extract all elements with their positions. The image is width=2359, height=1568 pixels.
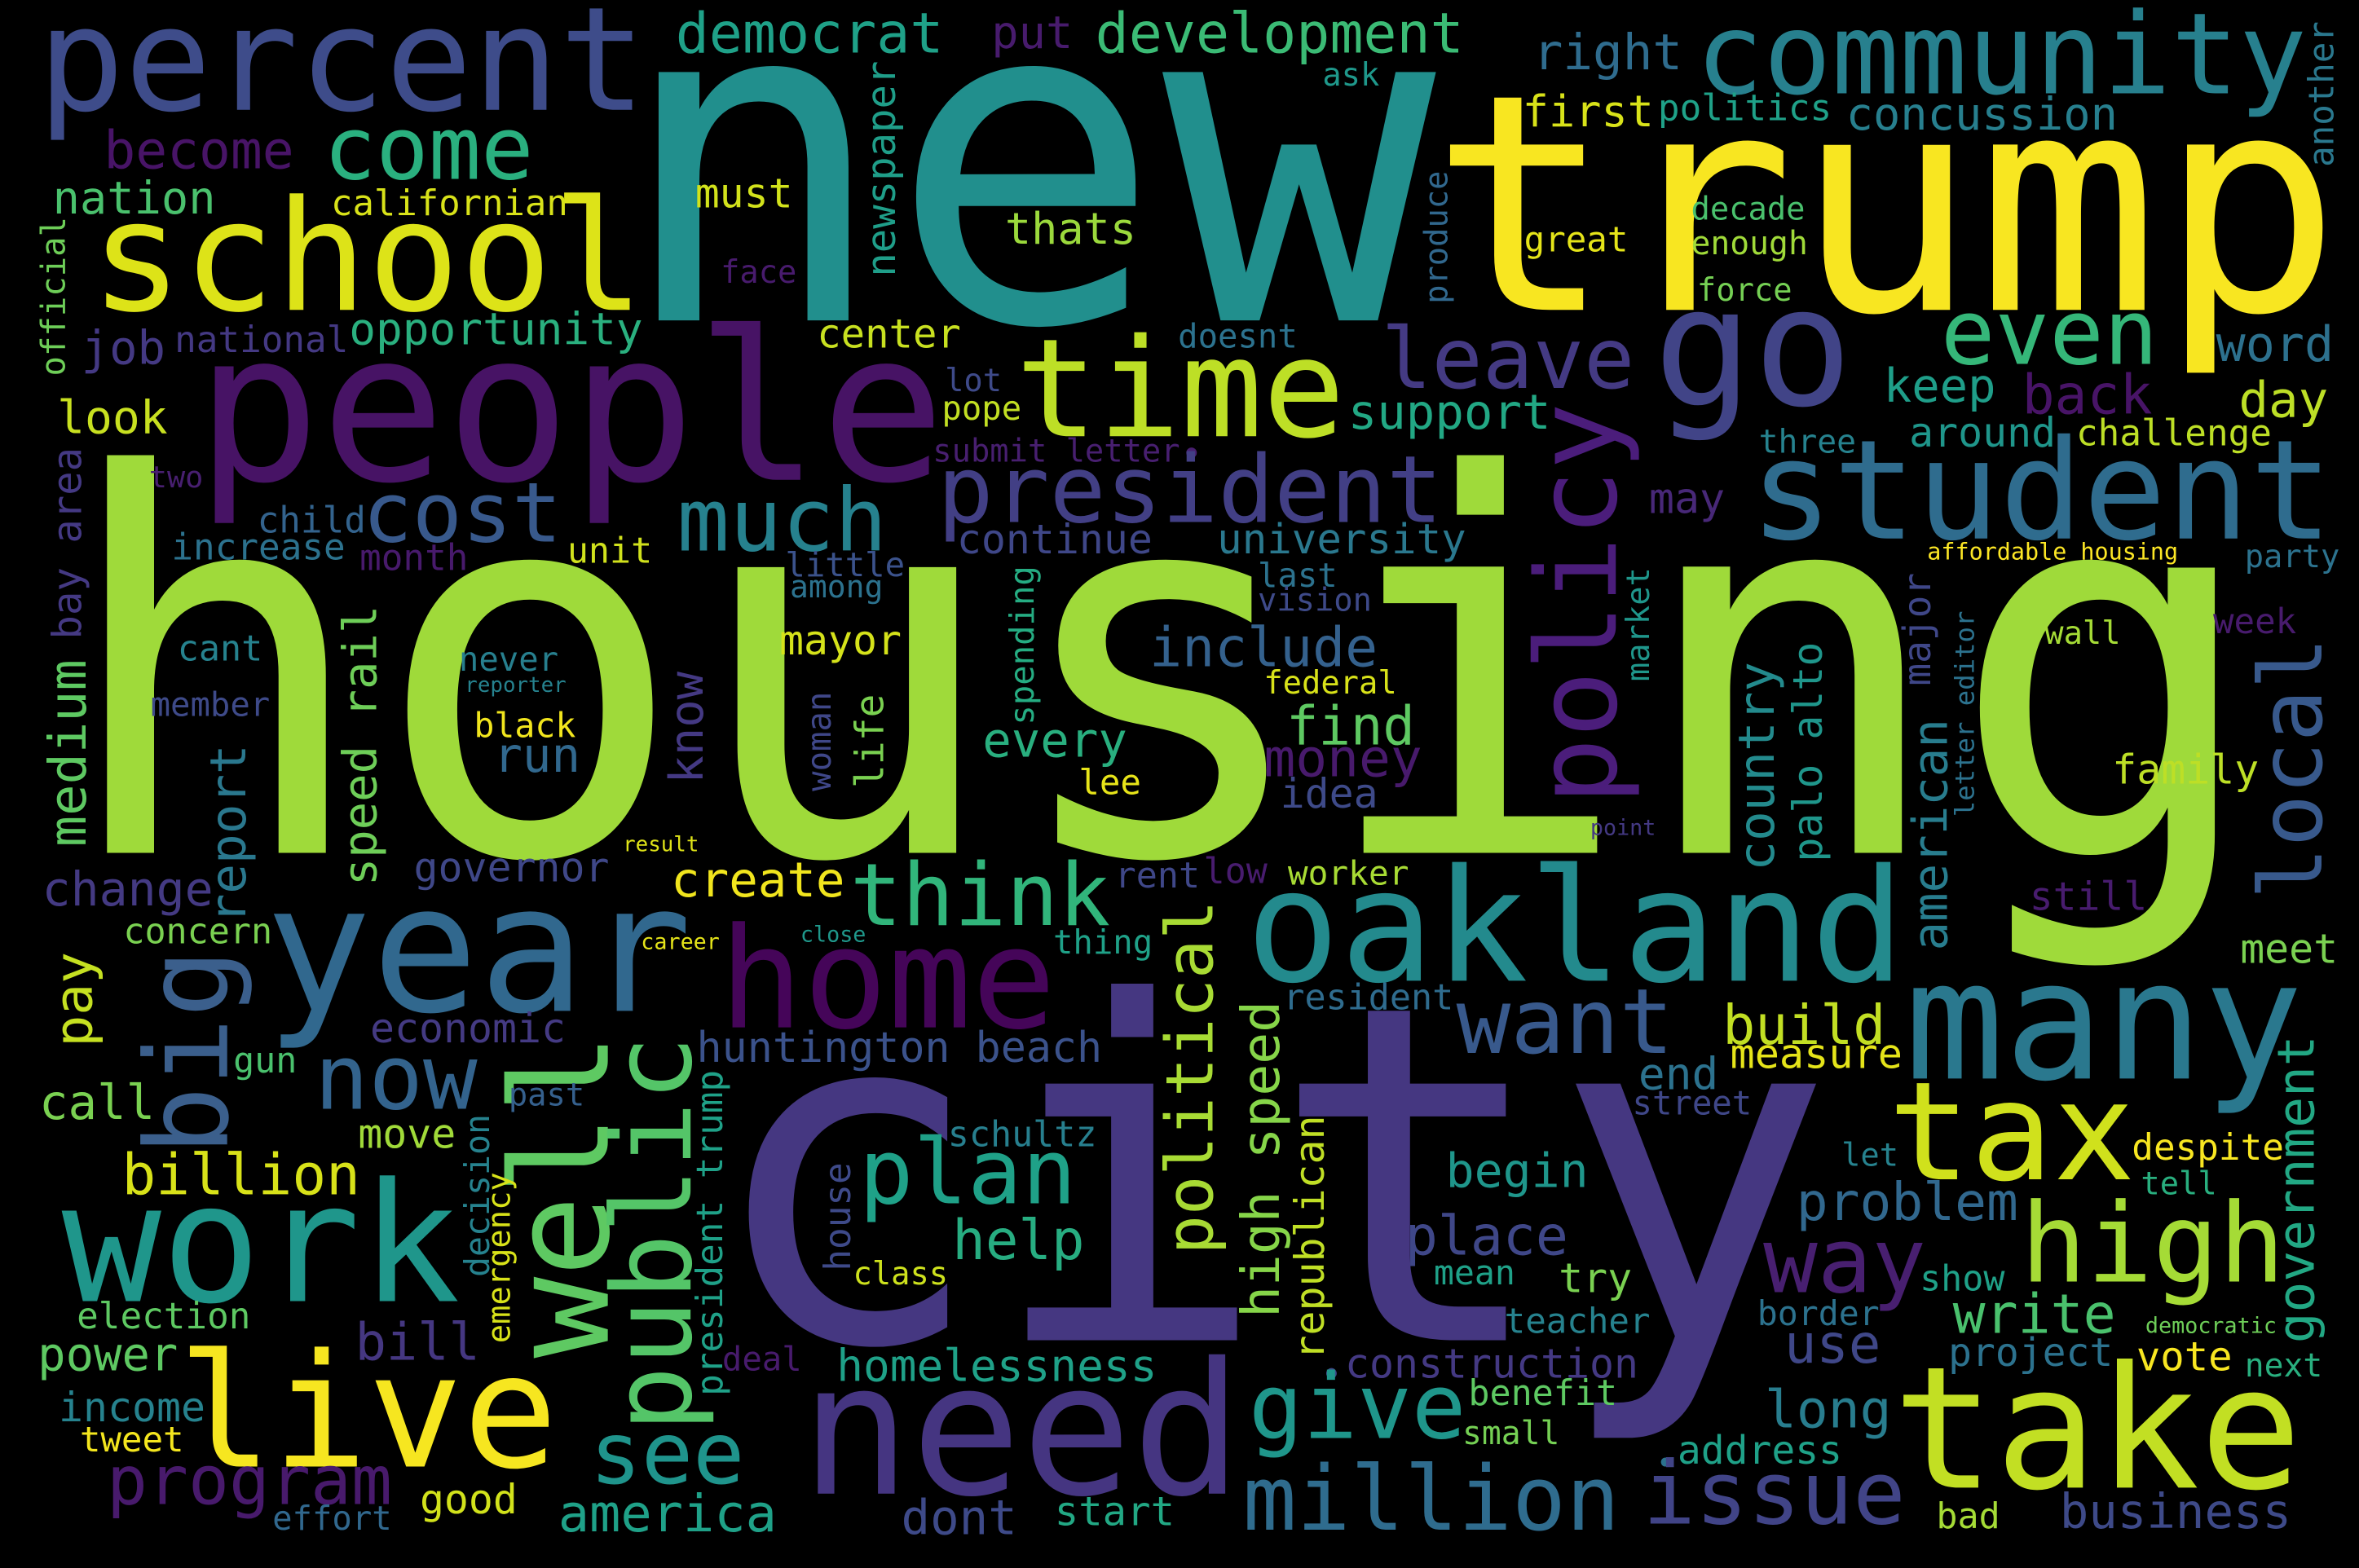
- word: produce: produce: [1419, 171, 1456, 304]
- word: family: family: [2112, 747, 2259, 794]
- word: back: back: [2022, 363, 2153, 427]
- word: bill: bill: [355, 1313, 480, 1373]
- word: address: address: [1678, 1428, 1842, 1473]
- word: submit letter: submit letter: [933, 434, 1180, 470]
- word: even: even: [1941, 281, 2158, 386]
- word: unit: unit: [567, 531, 652, 571]
- word: problem: problem: [1797, 1172, 2018, 1233]
- word: create: create: [671, 852, 844, 908]
- word: month: month: [359, 538, 468, 579]
- word: past: past: [509, 1077, 584, 1114]
- word: concussion: concussion: [1846, 89, 2118, 141]
- word: force: force: [1697, 272, 1792, 309]
- word: place: place: [1405, 1204, 1568, 1267]
- word: effort: effort: [272, 1499, 392, 1538]
- word: palo alto: palo alto: [1784, 642, 1832, 862]
- word: way: way: [1763, 1209, 1926, 1314]
- word: power: power: [37, 1328, 178, 1381]
- word: government: government: [2267, 1035, 2326, 1343]
- word: public: public: [589, 1035, 717, 1432]
- word: worker: worker: [1288, 853, 1409, 892]
- word: go: go: [1653, 252, 1853, 444]
- word: live: live: [178, 1320, 558, 1504]
- word: gun: gun: [233, 1041, 297, 1081]
- word: think: think: [850, 845, 1110, 946]
- word: move: move: [358, 1110, 456, 1157]
- word: big: big: [122, 949, 255, 1156]
- word: policy: policy: [1513, 403, 1642, 804]
- word: major: major: [1895, 573, 1939, 686]
- word: high speed: high speed: [1231, 1001, 1292, 1318]
- word: career: career: [641, 930, 720, 955]
- word: low: low: [1204, 851, 1268, 892]
- word: income: income: [59, 1384, 205, 1431]
- word: end: end: [1638, 1047, 1718, 1099]
- word: political: political: [1152, 900, 1228, 1254]
- word: run: run: [493, 727, 580, 783]
- word: despite: despite: [2132, 1127, 2284, 1169]
- word: official: official: [33, 217, 73, 376]
- word: woman: woman: [800, 692, 839, 791]
- word: next: next: [2245, 1347, 2322, 1385]
- word: doesnt: doesnt: [1178, 316, 1298, 355]
- word: bad: bad: [1936, 1496, 2000, 1537]
- word: teacher: teacher: [1505, 1302, 1651, 1341]
- word: two: two: [149, 460, 203, 495]
- word: little: little: [785, 545, 905, 584]
- word: include: include: [1149, 616, 1378, 680]
- word: black: black: [474, 705, 575, 745]
- word: cost: cost: [363, 465, 562, 561]
- word: vote: vote: [2136, 1333, 2233, 1380]
- word: week: week: [2213, 602, 2296, 642]
- word: need: need: [800, 1324, 1242, 1538]
- word: time: time: [1016, 309, 1345, 469]
- word: ask: ask: [1322, 57, 1379, 94]
- word: benefit: benefit: [1468, 1373, 1617, 1414]
- word: result: result: [623, 833, 699, 857]
- word: another: another: [2303, 21, 2343, 167]
- word: cant: cant: [178, 628, 262, 669]
- word: million: million: [1243, 1447, 1620, 1551]
- word: house: house: [818, 1162, 859, 1271]
- word: concern: concern: [123, 911, 272, 952]
- word: give: give: [1249, 1354, 1466, 1460]
- word: reporter: reporter: [465, 673, 567, 698]
- word: among: among: [790, 569, 883, 605]
- word: many: many: [1905, 925, 2304, 1117]
- word: speed rail: speed rail: [333, 606, 387, 886]
- word: federal: federal: [1263, 665, 1397, 702]
- word: still: still: [2030, 874, 2147, 920]
- word: president: president: [937, 435, 1443, 544]
- word: day: day: [2238, 371, 2328, 429]
- word: put: put: [991, 7, 1073, 59]
- word: opportunity: opportunity: [349, 303, 643, 355]
- word: decision: decision: [457, 1114, 497, 1277]
- word: high: high: [2021, 1180, 2285, 1308]
- word: use: use: [1784, 1314, 1881, 1376]
- word: change: change: [42, 861, 214, 917]
- word: member: member: [151, 685, 270, 725]
- word: challenge: challenge: [2076, 412, 2272, 454]
- word: see: see: [590, 1403, 745, 1504]
- word: newspaper: newspaper: [858, 61, 905, 277]
- word: start: start: [1055, 1489, 1175, 1535]
- word: last: last: [1258, 556, 1338, 595]
- word: close: close: [800, 922, 866, 947]
- word: thing: thing: [1053, 923, 1153, 962]
- word: vision: vision: [1258, 582, 1372, 619]
- word: every: every: [982, 711, 1127, 768]
- word: wall: wall: [2044, 615, 2121, 652]
- word: mean: mean: [1434, 1253, 1515, 1293]
- word: rent: rent: [1115, 856, 1200, 896]
- word: home: home: [719, 899, 1056, 1061]
- word: help: help: [952, 1208, 1085, 1272]
- word: know: know: [660, 671, 714, 784]
- word: politics: politics: [1658, 88, 1832, 130]
- word: must: must: [695, 170, 793, 218]
- word: child: child: [258, 500, 366, 541]
- word: let: let: [1841, 1137, 1898, 1174]
- word: show: show: [1920, 1259, 2005, 1300]
- word: spending: spending: [1003, 566, 1042, 725]
- word: money: money: [1263, 728, 1422, 789]
- word: decade: decade: [1691, 192, 1806, 228]
- word: democrat: democrat: [676, 2, 943, 67]
- word: lot: lot: [945, 363, 1002, 399]
- word: center: center: [817, 311, 961, 357]
- word: take: take: [1893, 1330, 2302, 1528]
- word: election: election: [77, 1296, 250, 1337]
- word: city: city: [704, 905, 1835, 1451]
- word: call: call: [39, 1074, 155, 1130]
- word: begin: begin: [1446, 1143, 1589, 1198]
- word: america: america: [558, 1484, 777, 1544]
- word: student: student: [1750, 411, 2333, 572]
- word: affordable housing: affordable housing: [1927, 539, 2178, 566]
- word: tax: tax: [1888, 1052, 2136, 1212]
- word: construction: construction: [1345, 1341, 1638, 1388]
- word: around: around: [1909, 409, 2056, 456]
- word: republican: republican: [1286, 1116, 1334, 1360]
- word: plan: plan: [859, 1121, 1077, 1226]
- word: mayor: mayor: [779, 617, 902, 664]
- word: program: program: [107, 1442, 392, 1521]
- word: schultz: schultz: [948, 1114, 1097, 1155]
- word: pay: pay: [44, 952, 105, 1047]
- word: small: small: [1462, 1415, 1559, 1452]
- word: dont: dont: [902, 1490, 1017, 1546]
- word: long: long: [1765, 1380, 1891, 1441]
- word: business: business: [2060, 1483, 2291, 1539]
- word: meet: meet: [2240, 925, 2338, 972]
- word: job: job: [82, 322, 165, 376]
- word: deal: deal: [722, 1339, 802, 1378]
- word: californian: californian: [331, 183, 568, 224]
- word: right: right: [1533, 24, 1682, 81]
- word: huntington beach: huntington beach: [697, 1024, 1102, 1072]
- word: try: try: [1559, 1254, 1632, 1302]
- word: support: support: [1348, 384, 1551, 440]
- word: face: face: [721, 254, 796, 291]
- word: emergency: emergency: [482, 1172, 518, 1343]
- word: project: project: [1948, 1330, 2113, 1376]
- word: never: never: [459, 640, 558, 679]
- word: oakland: oakland: [1246, 836, 1905, 1018]
- word: now: now: [315, 1025, 478, 1130]
- word: medium: medium: [38, 659, 99, 847]
- word: continue: continue: [957, 516, 1153, 563]
- word: tweet: tweet: [80, 1420, 184, 1460]
- word: write: write: [1953, 1282, 2116, 1346]
- word: first: first: [1523, 86, 1654, 137]
- word: border: border: [1757, 1293, 1880, 1333]
- word: economic: economic: [370, 1005, 566, 1052]
- word: nation: nation: [53, 173, 216, 225]
- word: housing: housing: [57, 368, 2264, 977]
- word: idea: idea: [1281, 770, 1378, 817]
- word: letter editor: letter editor: [1950, 611, 1981, 817]
- word: party: party: [2245, 539, 2339, 575]
- word: local: local: [2242, 637, 2343, 900]
- word: national: national: [174, 319, 348, 361]
- word: development: development: [1096, 2, 1464, 67]
- word: issue: issue: [1642, 1444, 1906, 1545]
- word: people: people: [196, 288, 946, 530]
- word: great: great: [1524, 220, 1628, 260]
- word: school: school: [90, 168, 645, 346]
- word: governor: governor: [414, 844, 610, 892]
- word: homelessness: homelessness: [836, 1339, 1157, 1391]
- word: pope: pope: [941, 389, 1021, 428]
- word: find: find: [1286, 696, 1415, 758]
- word: want: want: [1457, 970, 1673, 1075]
- word: trump: trump: [1431, 30, 2341, 381]
- word: measure: measure: [1731, 1029, 1903, 1077]
- word: may: may: [1649, 474, 1725, 523]
- word: report: report: [200, 744, 258, 923]
- word: increase: increase: [171, 527, 346, 569]
- word: leave: leave: [1381, 311, 1634, 408]
- word: democratic: democratic: [2145, 1313, 2277, 1338]
- word: bay area: bay area: [45, 447, 91, 639]
- word: street: street: [1633, 1084, 1752, 1123]
- word: american: american: [1902, 719, 1958, 950]
- word: tell: tell: [2141, 1165, 2217, 1202]
- word: look: look: [57, 392, 168, 445]
- word: thats: thats: [1005, 203, 1136, 254]
- word: well: well: [483, 1033, 641, 1359]
- word: country: country: [1728, 662, 1786, 871]
- word: market: market: [1620, 567, 1657, 681]
- word: become: become: [104, 121, 294, 182]
- word: keep: keep: [1884, 359, 1996, 413]
- word: come: come: [324, 99, 534, 200]
- word: university: university: [1217, 515, 1466, 563]
- word: class: class: [853, 1256, 948, 1293]
- word: work: work: [62, 1148, 461, 1341]
- word: billion: billion: [121, 1143, 360, 1208]
- word: word: word: [2216, 316, 2334, 373]
- word: resident: resident: [1283, 977, 1453, 1018]
- word: three: three: [1759, 424, 1856, 461]
- word: much: much: [677, 471, 887, 572]
- word: year: year: [265, 847, 692, 1053]
- word: lee: lee: [1078, 764, 1141, 804]
- word: build: build: [1722, 993, 1885, 1057]
- word: point: point: [1590, 815, 1656, 840]
- word: enough: enough: [1691, 225, 1808, 262]
- word: life: life: [847, 694, 893, 788]
- word: good: good: [420, 1476, 518, 1523]
- word: president trump: president trump: [690, 1070, 731, 1396]
